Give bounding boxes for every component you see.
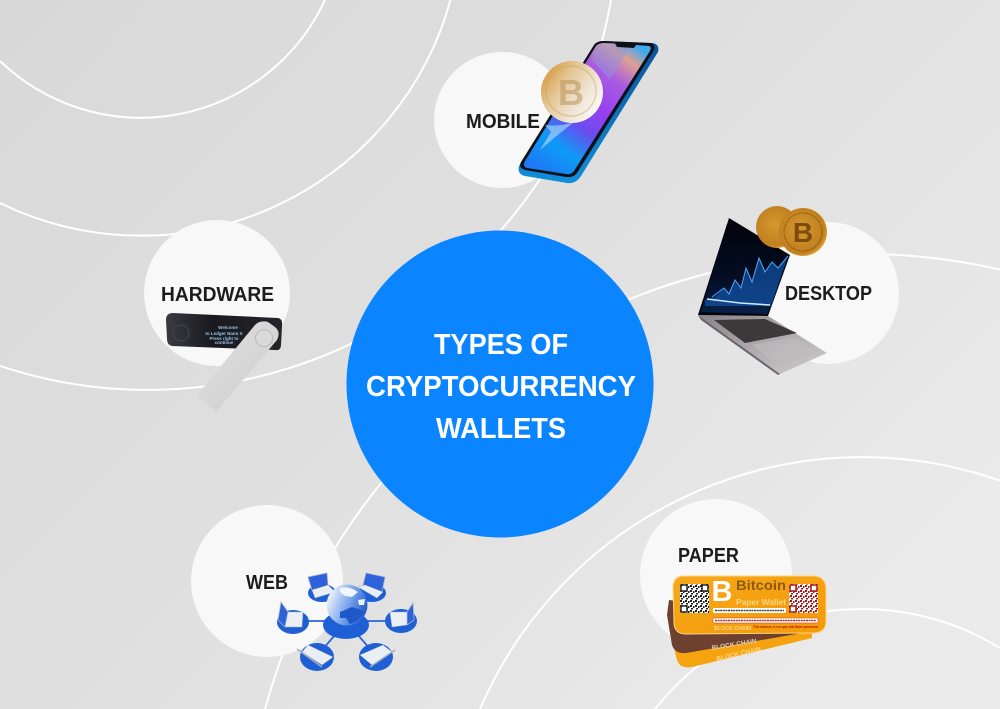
title: CRYPTOCURRENCY — [366, 371, 636, 403]
connector lines — [305, 621, 390, 650]
device screen text — [205, 325, 243, 345]
panel: hardware circle — [144, 220, 290, 366]
label: hardware: HARDWARE — [161, 284, 274, 306]
title: TYPES OF — [434, 329, 568, 361]
back card: brown: BLOCK CHAIN — [711, 638, 758, 652]
label: web: WEB — [246, 572, 288, 594]
bitcoin symbol: B — [712, 576, 732, 608]
icon: paper wallets — [667, 576, 826, 667]
label: desktop: DESKTOP — [785, 283, 872, 305]
title: WALLETS — [436, 413, 566, 445]
device screen text: to Ledger Nano X — [205, 331, 243, 336]
device screen text: continue — [215, 340, 234, 345]
label: mobile: MOBILE — [466, 111, 540, 133]
back card: brown — [667, 600, 820, 653]
front card — [673, 576, 826, 634]
back card: orange: BLOCK CHAIN — [716, 646, 762, 663]
brand name: Bitcoin — [736, 577, 786, 593]
panel: mobile circle — [434, 52, 570, 188]
front card label: BLOCK CHAIN — [714, 626, 751, 632]
label: paper: PAPER — [678, 545, 740, 567]
coin symbol: B — [558, 72, 584, 113]
icon: web network — [277, 573, 417, 671]
device screen text: Welcome — [218, 325, 238, 330]
device screen text: Press right to — [209, 336, 239, 341]
icon: laptop with coins — [698, 206, 827, 375]
back card: orange — [672, 625, 812, 667]
title — [366, 329, 636, 445]
panel: central circle — [346, 230, 654, 538]
icon: smartphone with coin — [519, 41, 658, 183]
panel: desktop circle — [757, 222, 899, 364]
panel: web circle — [191, 505, 343, 657]
wallet label: Paper Wallet — [736, 598, 786, 607]
red notice: This address is encrypt with Bank password — [753, 625, 818, 629]
panel: paper circle — [640, 499, 792, 651]
icon: hardware wallet — [166, 313, 282, 412]
coin symbol: B — [793, 217, 813, 248]
